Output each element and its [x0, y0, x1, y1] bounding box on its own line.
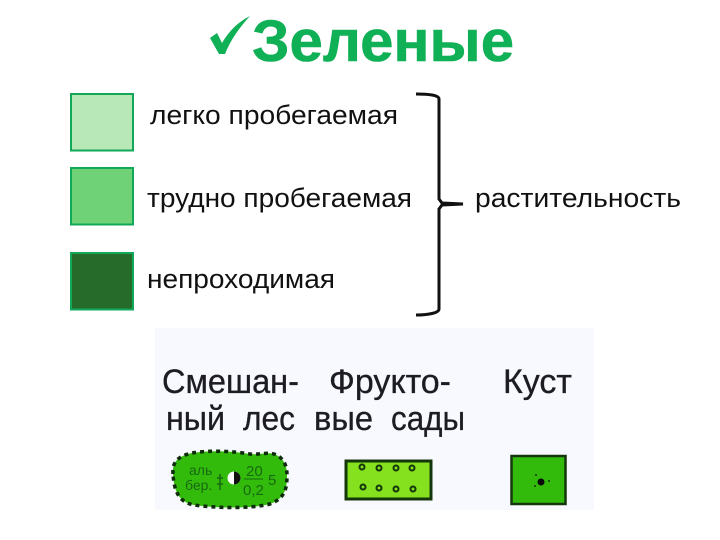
legend: swatches and labels: [71, 94, 412, 310]
panel: map symbols: [155, 328, 594, 510]
label: vegetation: растительность: [475, 183, 681, 213]
label: hard to run: трудно пробегаемая: [147, 183, 412, 213]
map symbol: mixed forest: бер.: [185, 477, 212, 493]
swatch: easily runnable vegetation: [71, 94, 133, 150]
label: impassable: непроходимая: [147, 264, 335, 294]
symbol name: orchards: Фрукто-: [329, 363, 451, 401]
map symbol: mixed forest: 20: [246, 463, 263, 480]
map symbol: orchard: [346, 461, 431, 499]
symbol name: mixed forest: ный: [166, 400, 225, 438]
icon: check mark: [210, 16, 250, 54]
swatch: hard to run vegetation: [71, 168, 133, 224]
symbol name: orchards: сады: [391, 400, 465, 438]
symbol name: mixed forest: лес: [243, 400, 295, 438]
map symbol: mixed forest: 0,2: [243, 482, 264, 499]
symbol name: orchards: вые: [314, 400, 373, 438]
map symbol: mixed forest: аль: [189, 462, 212, 478]
swatch: impassable vegetation: [71, 253, 133, 310]
symbol name: bush: Куст: [503, 363, 572, 401]
map symbol: mixed forest: 5: [268, 472, 276, 489]
map symbol: mixed forest: [173, 451, 287, 508]
brace: [416, 94, 463, 315]
map symbol: bush: [512, 456, 566, 504]
symbol name: mixed forest: Смешан-: [162, 363, 299, 401]
label: easily runnable: легко пробегаемая: [150, 100, 398, 130]
title: Зеленые: [252, 9, 514, 74]
